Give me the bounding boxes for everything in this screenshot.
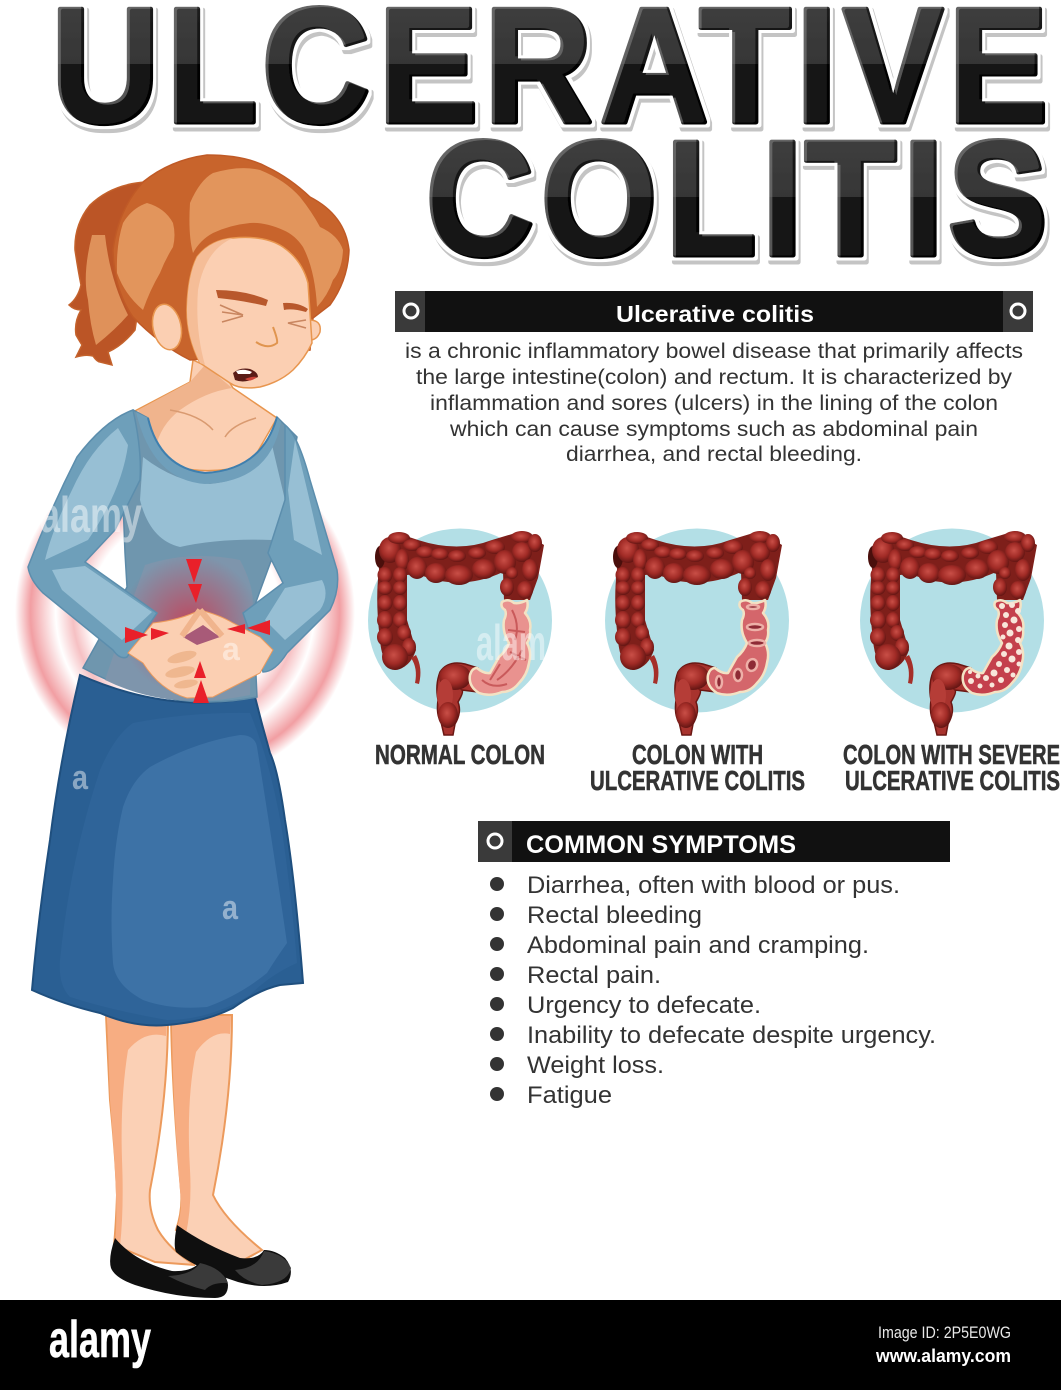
legs <box>106 1015 262 1265</box>
head hair and face <box>113 155 349 388</box>
symptoms list: Inability to defecate despite urgency. <box>527 1022 936 1049</box>
mouth <box>233 368 258 381</box>
shirt torso <box>83 410 297 702</box>
label: colon with ulcerative colitis: COLON WITH <box>632 739 763 770</box>
symptoms list: Weight loss. <box>527 1052 664 1079</box>
face <box>187 237 312 388</box>
label: normal colon: NORMAL COLON <box>375 739 545 770</box>
website: www.alamy.com <box>875 1346 1011 1366</box>
colon diagram: with severe ulcerative colitis <box>843 528 1060 796</box>
title: ulcerative colitis: COLITIS <box>426 107 1048 290</box>
title: ulcerative colitis <box>51 0 1049 290</box>
footer logo: alamy <box>49 1311 151 1369</box>
shoes <box>110 1225 291 1298</box>
watermark overlays: a <box>72 759 89 797</box>
watermark overlays: alamy <box>40 487 142 543</box>
abdominal pain glow <box>120 555 260 695</box>
symptoms list <box>490 872 936 1109</box>
description text: diarrhea, and rectal bleeding. <box>566 443 862 466</box>
hair <box>113 155 349 360</box>
symptoms list: Diarrhea, often with blood or pus. <box>527 872 900 899</box>
description text: which can cause symptoms such as abdominal pain <box>449 418 978 441</box>
watermark overlays: alam <box>476 615 546 671</box>
clasped hands <box>128 610 273 698</box>
image id: Image ID: 2P5E0WG <box>878 1323 1011 1342</box>
cutaway: inflamed lining <box>708 600 768 695</box>
closed eyes <box>220 305 306 328</box>
skirt <box>32 675 303 1026</box>
illustration: woman with abdominal pain <box>15 155 355 1298</box>
leg shadows <box>107 1016 231 1246</box>
watermark overlays: a <box>222 889 239 927</box>
label: colon with ulcerative colitis <box>590 739 805 796</box>
bullets <box>490 877 504 1101</box>
header bar: common symptoms: COMMON SYMPTOMS <box>526 831 796 859</box>
header bar: common symptoms <box>478 821 950 862</box>
cutaway: severe ulcers <box>963 600 1023 695</box>
collarbones <box>170 410 256 437</box>
symptoms list: Urgency to defecate. <box>527 992 761 1019</box>
red pain arrows <box>125 559 270 703</box>
hair highlights <box>189 168 343 307</box>
colon diagram: normal <box>368 528 552 770</box>
symptoms list: Abdominal pain and cramping. <box>527 932 869 959</box>
symptoms list: Rectal bleeding <box>527 902 702 929</box>
watermark overlays <box>40 487 546 927</box>
nose <box>256 327 277 346</box>
description text: is a chronic inflammatory bowel disease that primarily affects <box>405 340 1023 363</box>
left arm sleeve <box>28 410 157 658</box>
header bar: ulcerative colitis: Ulcerative colitis <box>616 301 814 327</box>
symptoms list: Rectal pain. <box>527 962 661 989</box>
label: colon with severe ulcerative colitis <box>843 739 1060 796</box>
pain glow rings <box>15 442 355 782</box>
description text: inflammation and sores (ulcers) in the lining of the colon <box>430 392 998 415</box>
description text <box>405 340 1023 466</box>
ponytail <box>69 182 150 365</box>
face shadow <box>187 238 233 365</box>
footer bar <box>0 1300 1061 1390</box>
description text: the large intestine(colon) and rectum. It is characterized by <box>416 366 1013 389</box>
ear <box>149 302 185 352</box>
neck shadow <box>138 365 232 450</box>
cutaway: healthy lining <box>470 600 530 695</box>
right arm sleeve <box>243 425 338 672</box>
far ear <box>309 320 320 340</box>
watermark overlays: a <box>222 631 240 667</box>
colon diagram: with ulcerative colitis <box>590 528 805 796</box>
symptoms list: Fatigue <box>527 1082 612 1109</box>
eyebrows <box>216 290 308 312</box>
neck <box>133 360 277 471</box>
label: colon with ulcerative colitis: ULCERATIVE COLITIS <box>590 765 805 796</box>
header bar: ulcerative colitis <box>395 291 1033 332</box>
